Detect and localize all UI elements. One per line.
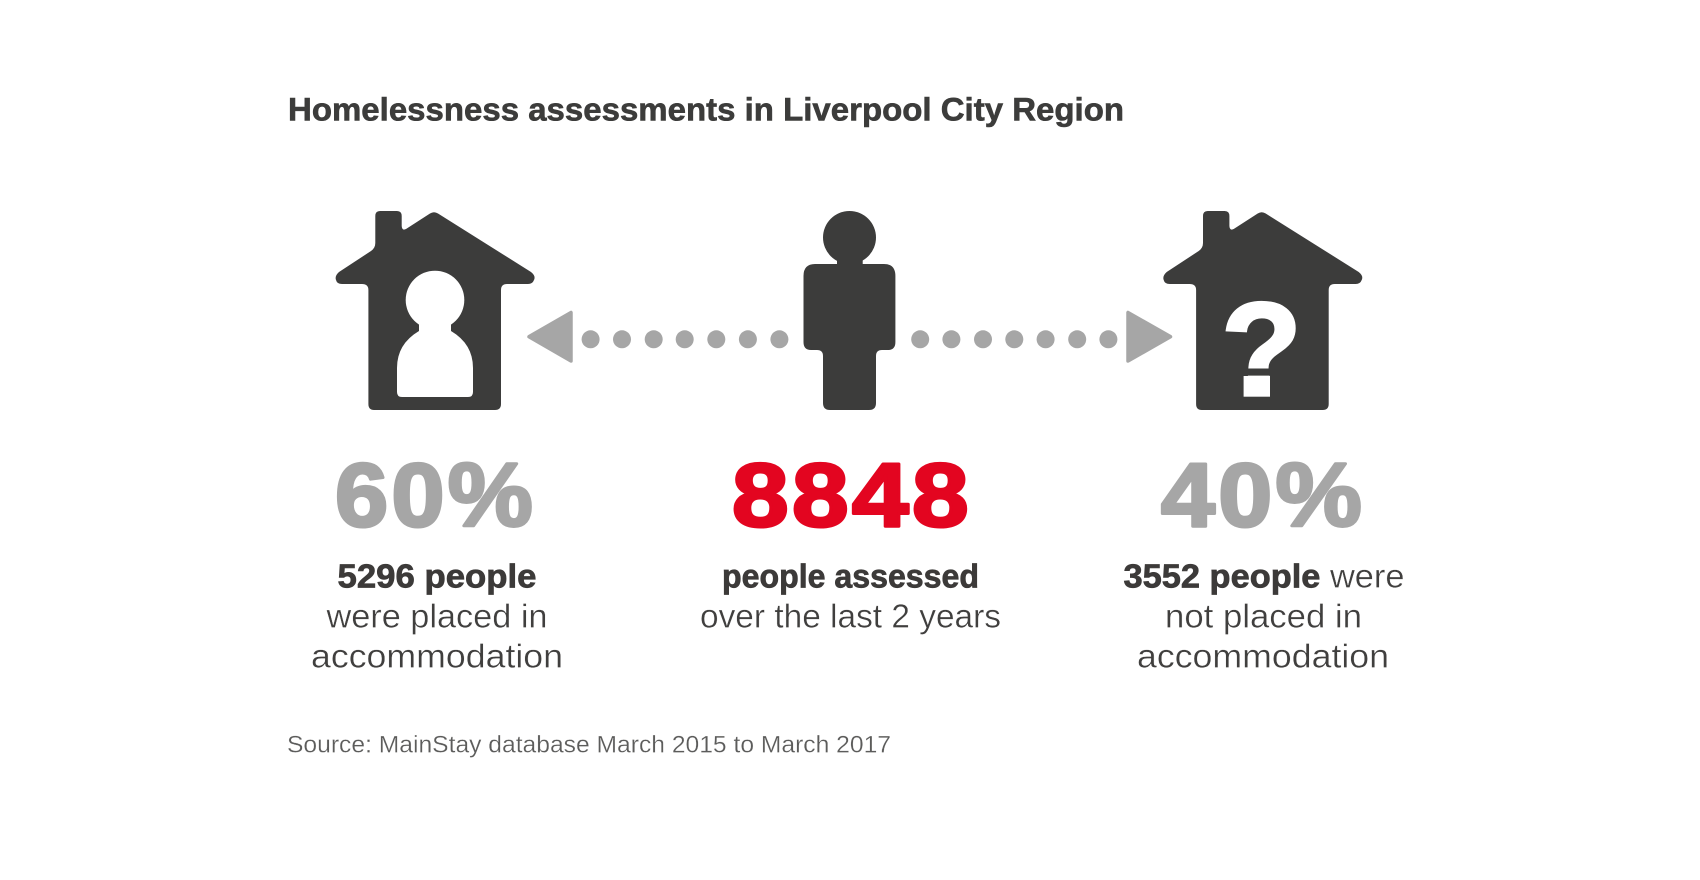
caption: accommodation: accommodation xyxy=(1137,638,1389,674)
caption: were placed in: were placed in xyxy=(325,598,548,634)
icon: person xyxy=(804,211,895,410)
icon: house with question mark xyxy=(1163,211,1362,422)
number: 60%: 60% xyxy=(335,446,536,546)
stat: 8848 assessed xyxy=(700,446,1001,634)
arrow: left dotted arrow xyxy=(529,312,788,361)
number: 8848: 8848 xyxy=(732,446,972,546)
icon: house with question mark: ? xyxy=(1221,276,1302,422)
source note: Source: MainStay database March 2015 to March 2017 xyxy=(287,732,891,759)
number: 40%: 40% xyxy=(1161,446,1365,546)
caption: 3552 people were: 3552 people were xyxy=(1124,557,1404,594)
stat: 40% not placed xyxy=(1124,446,1404,674)
arrow: right dotted arrow xyxy=(911,312,1170,361)
caption: people assessed: people assessed xyxy=(722,557,979,594)
caption: 5296 people: 5296 people xyxy=(338,557,536,594)
title: Homelessness assessments in Liverpool City Region xyxy=(288,92,1124,128)
caption: not placed in: not placed in xyxy=(1165,598,1362,634)
icon: house with person xyxy=(336,211,535,410)
caption: accommodation: accommodation xyxy=(311,638,563,674)
stat: 60% placed xyxy=(311,446,563,674)
caption: over the last 2 years: over the last 2 years xyxy=(700,598,1001,634)
